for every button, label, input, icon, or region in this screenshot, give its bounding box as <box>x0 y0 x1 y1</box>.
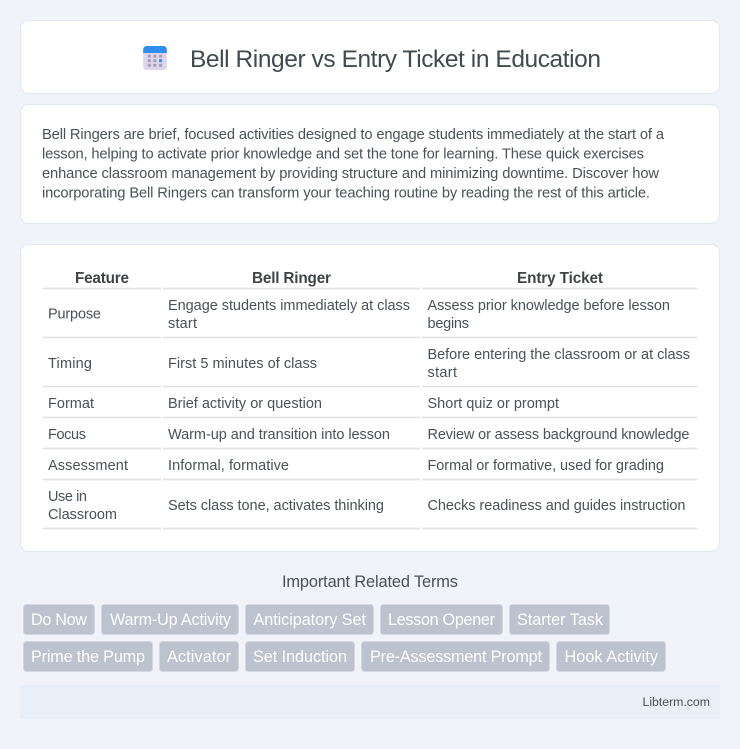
panel: title card <box>20 20 720 94</box>
table header row: Bell Ringer <box>252 270 331 287</box>
table row: Timing: Before entering the classroom or at class <box>428 347 690 363</box>
table row: Focus <box>48 427 690 443</box>
tag: Hook Activity <box>556 642 666 672</box>
table row: Purpose: start <box>168 316 197 332</box>
table row: Assessment: Formal or formative, used for grading <box>428 458 664 474</box>
table row: Purpose: Assess prior knowledge before lesson <box>428 298 670 314</box>
tag: Do Now: Do Now <box>31 611 87 629</box>
tag: Activator: Activator <box>167 648 232 666</box>
text block: introduction paragraph: enhance classroom management by providing structure and minimizing downtime. Discover how <box>42 166 659 182</box>
tag: Warm-Up Activity <box>102 604 238 634</box>
panel: comparison table <box>20 244 720 552</box>
table row: Assessment: Assessment <box>48 458 128 474</box>
table row: Format: Format <box>48 396 94 412</box>
table row: Purpose <box>48 298 670 332</box>
text block: introduction paragraph: lesson, helping to activate prior knowledge and set the tone for learning. These quick exercises <box>42 146 644 162</box>
table row: Use in Classroom: Use in <box>48 489 87 505</box>
text block: introduction paragraph <box>42 127 665 202</box>
tag: Prime the Pump <box>24 642 152 672</box>
tag: Anticipatory Set <box>246 604 374 634</box>
table row: Format <box>48 396 559 412</box>
table row: Timing: Timing <box>48 356 92 372</box>
tag: Starter Task: Starter Task <box>517 611 604 629</box>
tag: Hook Activity: Hook Activity <box>564 648 659 666</box>
tag: Pre-Assessment Prompt: Pre-Assessment Prompt <box>370 648 542 666</box>
tag: Prime the Pump: Prime the Pump <box>31 648 145 666</box>
footer <box>20 685 720 719</box>
table row: Purpose: begins <box>428 316 469 332</box>
footer credit: Libterm.com <box>642 695 710 709</box>
table row: Format: Brief activity or question <box>168 396 322 412</box>
table row: Use in Classroom <box>48 489 686 523</box>
tag: Set Induction: Set Induction <box>253 648 347 666</box>
heading: important related terms: Important Related Terms <box>282 573 458 591</box>
table header row <box>75 270 603 287</box>
table row: Focus: Review or assess background knowledge <box>428 427 690 443</box>
table row: Timing <box>48 347 690 381</box>
table header row: Feature <box>75 270 129 287</box>
table row: Use in Classroom: Sets class tone, activates thinking <box>168 498 384 514</box>
text block: introduction paragraph: Bell Ringers are brief, focused activities designed to engage students immediately at the start of a <box>42 127 665 143</box>
tag: Lesson Opener: Lesson Opener <box>388 611 496 629</box>
text block: introduction paragraph: incorporating Bell Ringers can transform your teaching routine by reading the rest of this article. <box>42 186 650 202</box>
tag: Warm-Up Activity: Warm-Up Activity <box>110 611 232 629</box>
table row: Use in Classroom: Classroom <box>48 507 117 523</box>
tag: Do Now <box>24 604 94 634</box>
table row: Timing: First 5 minutes of class <box>168 356 317 372</box>
tags: related terms <box>24 604 666 672</box>
table row: Assessment: Informal, formative <box>168 458 289 474</box>
table row: Purpose: Engage students immediately at class <box>168 298 410 314</box>
table row: Focus: Warm-up and transition into lesson <box>168 427 390 443</box>
title: Bell Ringer vs Entry Ticket in Education <box>190 46 601 73</box>
tag: Anticipatory Set: Anticipatory Set <box>254 611 366 629</box>
tag: Activator <box>160 642 238 672</box>
tag: Pre-Assessment Prompt <box>362 642 550 672</box>
tag: Starter Task <box>510 604 610 634</box>
table row: Purpose: Purpose <box>48 306 101 322</box>
table row: Assessment <box>48 458 664 474</box>
icon: calendar <box>143 46 167 70</box>
table row: Format: Short quiz or prompt <box>428 396 559 412</box>
table header row: Entry Ticket <box>517 270 603 287</box>
tag: Set Induction <box>246 642 354 672</box>
panel: introduction <box>20 104 720 224</box>
table row: Use in Classroom: Checks readiness and guides instruction <box>428 498 686 514</box>
table row: Timing: start <box>428 365 457 381</box>
table row: Focus: Focus <box>48 427 86 443</box>
tag: Lesson Opener <box>380 604 502 634</box>
